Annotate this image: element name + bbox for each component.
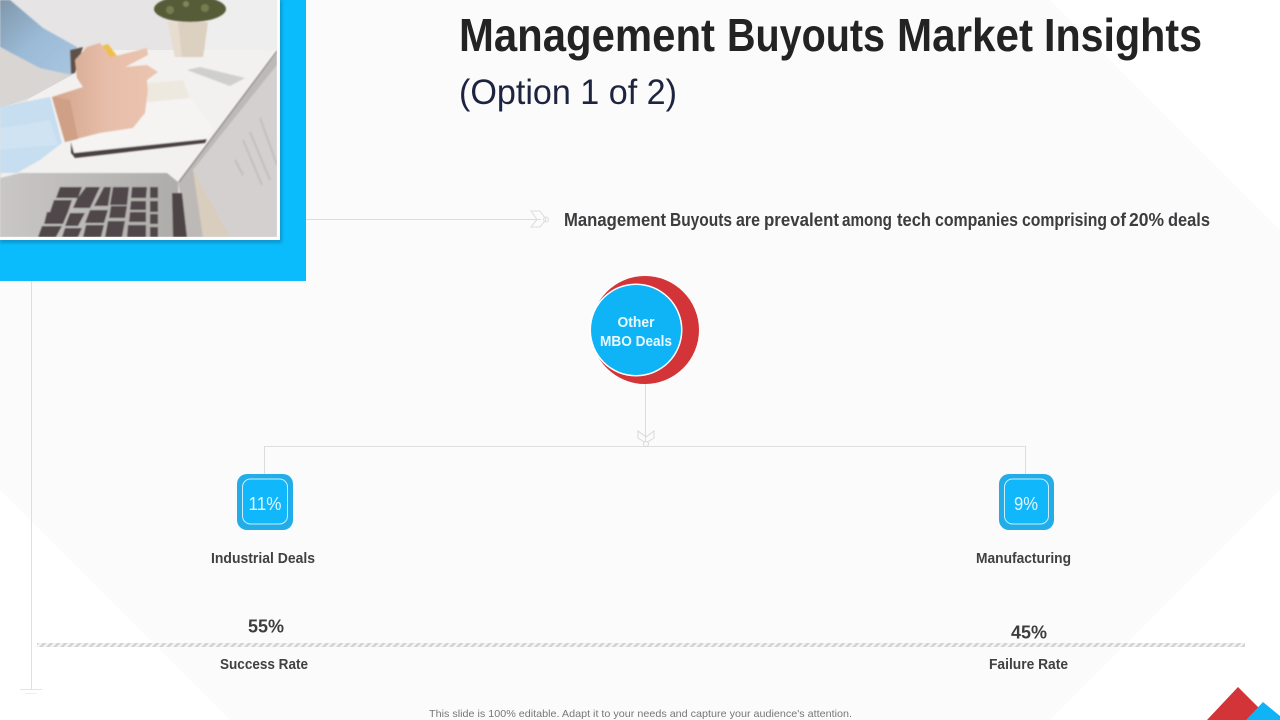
label: industrial deals: Industrial Deals <box>211 551 315 567</box>
left vertical connector line <box>20 281 42 694</box>
statement text: 20% <box>1129 209 1164 230</box>
title <box>459 9 1202 61</box>
badge: manufacturing 9% <box>999 474 1054 530</box>
corner triangles <box>1207 687 1280 720</box>
notebook <box>71 138 207 155</box>
photo frame <box>0 0 280 240</box>
statement text: Management <box>564 209 666 230</box>
title: Market <box>897 9 1033 61</box>
subtitle: (Option 1 of 2) <box>459 73 677 112</box>
blue backing panel <box>0 0 306 281</box>
statement text: among <box>842 209 892 230</box>
laptop base <box>0 173 180 237</box>
title: Buyouts <box>727 9 885 61</box>
circle: other MBO deals: Other <box>618 315 655 331</box>
circle: other MBO deals <box>590 276 699 384</box>
icon: down arrow <box>638 431 654 446</box>
laptop screen <box>193 65 277 237</box>
arrow: photo to statement <box>306 211 548 227</box>
statement text: of <box>1110 209 1127 230</box>
statement text: prevalent <box>764 209 839 230</box>
badge: industrial deals 11% <box>237 474 293 530</box>
photo shadow <box>0 0 282 243</box>
upper sleeve <box>0 0 77 75</box>
pencil <box>102 43 118 58</box>
connector tree <box>264 384 1026 475</box>
hand <box>52 43 158 142</box>
paper <box>147 80 190 102</box>
label: success rate: Success Rate <box>220 657 308 673</box>
statement text: are <box>736 209 760 230</box>
title: Insights <box>1044 9 1202 61</box>
footer note: This slide is 100% editable. Adapt it to your needs and capture your audience's attention. <box>429 708 852 720</box>
laptop bezel <box>178 52 277 237</box>
label: failure rate: Failure Rate <box>989 657 1068 673</box>
statement text: comprising <box>1022 209 1107 230</box>
keyboard keys <box>38 187 158 237</box>
screen text lines <box>235 118 277 185</box>
statement text: Buyouts <box>670 209 732 230</box>
badge: manufacturing 9%: 9% <box>1014 494 1038 514</box>
statement text: deals <box>1168 209 1210 230</box>
value: 55%: 55% <box>248 616 284 636</box>
label: manufacturing: Manufacturing <box>976 551 1071 567</box>
title: Management <box>459 9 715 61</box>
plant <box>154 0 226 22</box>
photo: person working at a laptop <box>0 0 277 237</box>
statement text: companies <box>935 209 1018 230</box>
statement text <box>564 209 1210 230</box>
laptop hinge <box>172 193 187 237</box>
value: 45%: 45% <box>1011 622 1047 642</box>
statement text: tech <box>897 209 931 230</box>
lower sleeve <box>0 97 62 173</box>
panel: photo block <box>0 0 306 281</box>
hatched divider <box>37 643 1245 647</box>
badge: industrial deals 11%: 11% <box>248 494 282 514</box>
phone <box>187 67 245 86</box>
circle: other MBO deals: MBO Deals <box>600 334 672 350</box>
